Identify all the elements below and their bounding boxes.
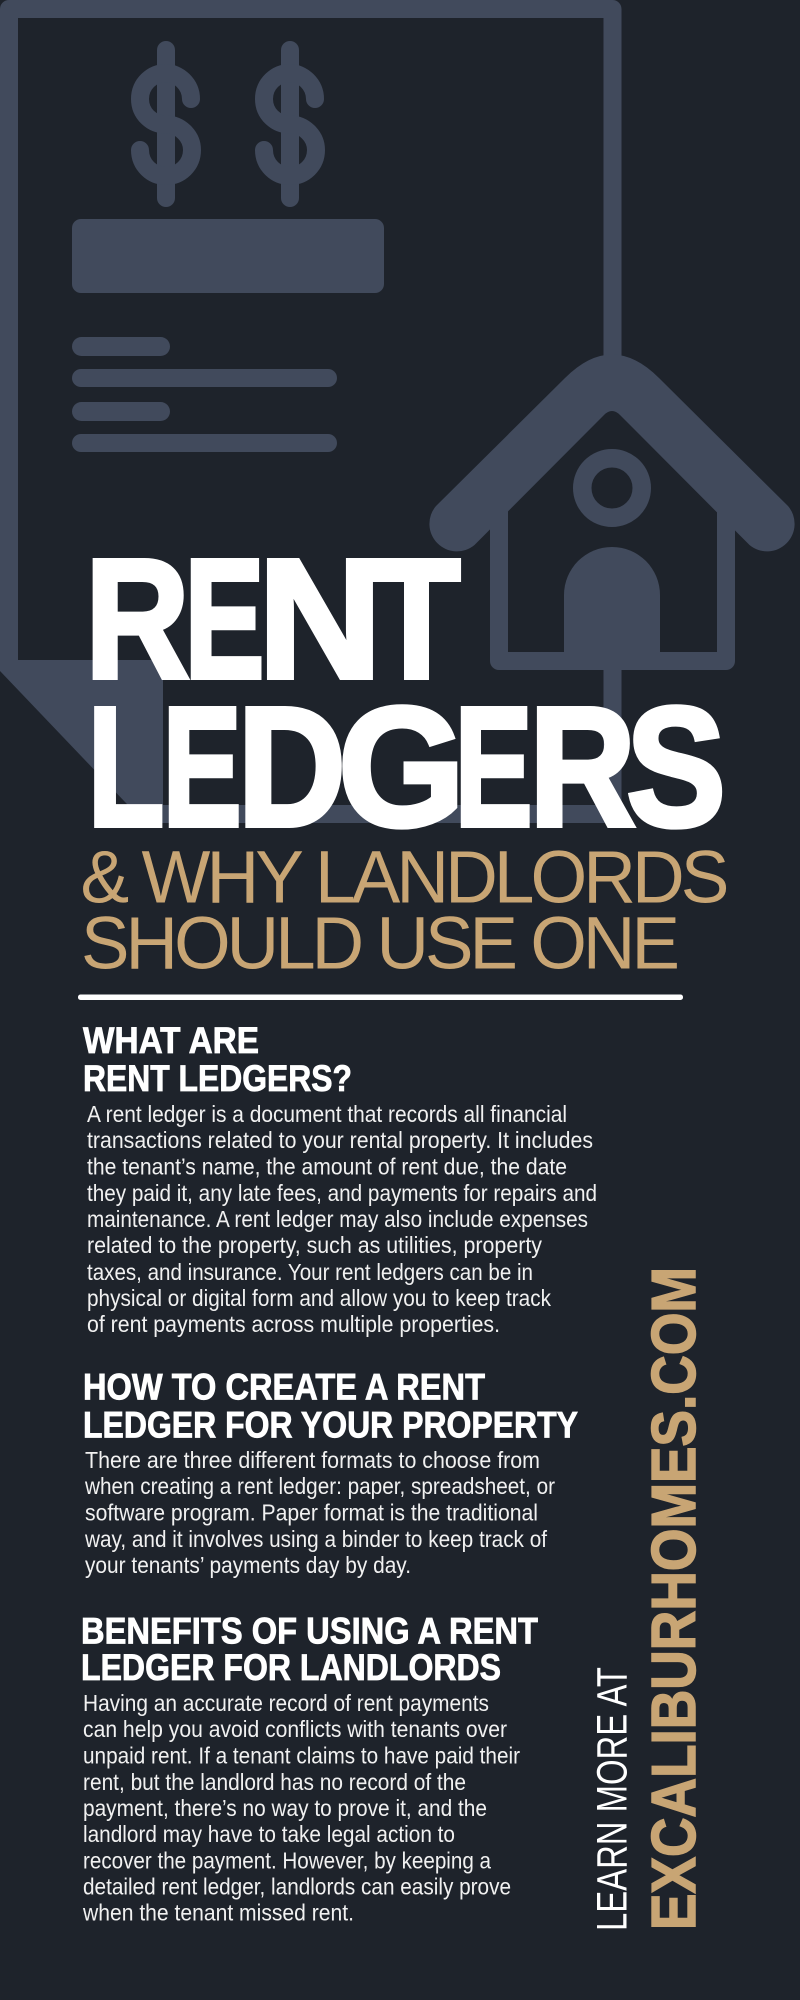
- body text: the tenant’s name, the amount of rent due, the date: [87, 1154, 567, 1180]
- body text: maintenance. A rent ledger may also include expenses: [87, 1206, 588, 1232]
- section: how to create a rent ledger: [83, 1366, 578, 1578]
- title: rent ledgers: T: [372, 524, 460, 714]
- body text: your tenants’ payments day by day.: [85, 1552, 411, 1578]
- title: rent ledgers: R: [529, 672, 636, 862]
- title: rent ledgers: G: [338, 672, 465, 862]
- title: rent ledgers: D: [238, 672, 346, 862]
- document amount box: [72, 219, 384, 293]
- body text: transactions related to your rental property. It includes: [87, 1127, 593, 1153]
- heading: LEDGER FOR YOUR PROPERTY: [83, 1404, 578, 1446]
- title: rent ledgers: L: [88, 672, 164, 862]
- title: rent ledgers: [85, 524, 726, 862]
- body text: related to the property, such as utilities, property: [87, 1232, 542, 1258]
- body text: unpaid rent. If a tenant claims to have paid their: [83, 1742, 520, 1768]
- title: rent ledgers: E: [163, 672, 242, 862]
- section: benefits of using a rent ledger: [81, 1610, 538, 1926]
- body text: [84, 1447, 555, 1578]
- title: rent ledgers: R: [85, 524, 190, 714]
- heading: RENT LEDGERS?: [83, 1058, 352, 1099]
- subtitle: [80, 836, 726, 984]
- icon: house: [429, 354, 795, 661]
- body text: physical or digital form and allow you to keep track: [87, 1285, 551, 1311]
- body text: detailed rent ledger, landlords can easily prove: [83, 1874, 511, 1900]
- body text: [82, 1690, 520, 1926]
- call to action: learn more: LEARN MORE AT: [588, 1667, 636, 1931]
- subtitle: & WHY LANDLORDS: [80, 836, 726, 918]
- heading: [81, 1610, 538, 1688]
- body text: when the tenant missed rent.: [82, 1900, 354, 1926]
- icon: dollar signs: [140, 50, 316, 198]
- body text: landlord may have to take legal action to: [83, 1821, 455, 1847]
- body text: [87, 1101, 597, 1337]
- body text: rent, but the landlord has no record of the: [83, 1769, 466, 1795]
- body text: software program. Paper format is the traditional: [85, 1500, 538, 1526]
- body text: of rent payments across multiple properties.: [87, 1311, 500, 1337]
- document text lines: [72, 337, 337, 452]
- body text: can help you avoid conflicts with tenants over: [83, 1716, 507, 1742]
- body text: way, and it involves using a binder to keep track of: [84, 1526, 548, 1552]
- body text: A rent ledger is a document that records all financial: [87, 1101, 567, 1127]
- website url: EXCALIBURHOMES.COM: [640, 1267, 709, 1930]
- body text: when creating a rent ledger: paper, spreadsheet, or: [84, 1473, 555, 1499]
- body text: recover the payment. However, by keeping a: [83, 1848, 491, 1874]
- section: what are rent ledgers: [83, 1020, 597, 1337]
- body text: taxes, and insurance. Your rent ledgers can be in: [87, 1259, 533, 1285]
- divider rule: [78, 994, 683, 1000]
- body text: There are three different formats to choose from: [85, 1447, 540, 1473]
- heading: [83, 1020, 352, 1099]
- body text: payment, there’s no way to prove it, and the: [83, 1795, 487, 1821]
- subtitle: SHOULD USE ONE: [81, 902, 678, 984]
- body text: Having an accurate record of rent payments: [83, 1690, 489, 1716]
- title: rent ledgers: N: [258, 524, 382, 714]
- heading: WHAT ARE: [83, 1020, 259, 1061]
- body text: they paid it, any late fees, and payments for repairs and: [87, 1180, 597, 1206]
- heading: BENEFITS OF USING A RENT: [81, 1610, 538, 1652]
- heading: LEDGER FOR LANDLORDS: [81, 1647, 501, 1688]
- heading: HOW TO CREATE A RENT: [83, 1366, 485, 1408]
- heading: [83, 1366, 578, 1446]
- icon: rent document: [0, 9, 622, 823]
- title: rent ledgers: S: [626, 672, 726, 862]
- title: rent ledgers: E: [184, 524, 264, 714]
- title: rent ledgers: E: [455, 672, 532, 862]
